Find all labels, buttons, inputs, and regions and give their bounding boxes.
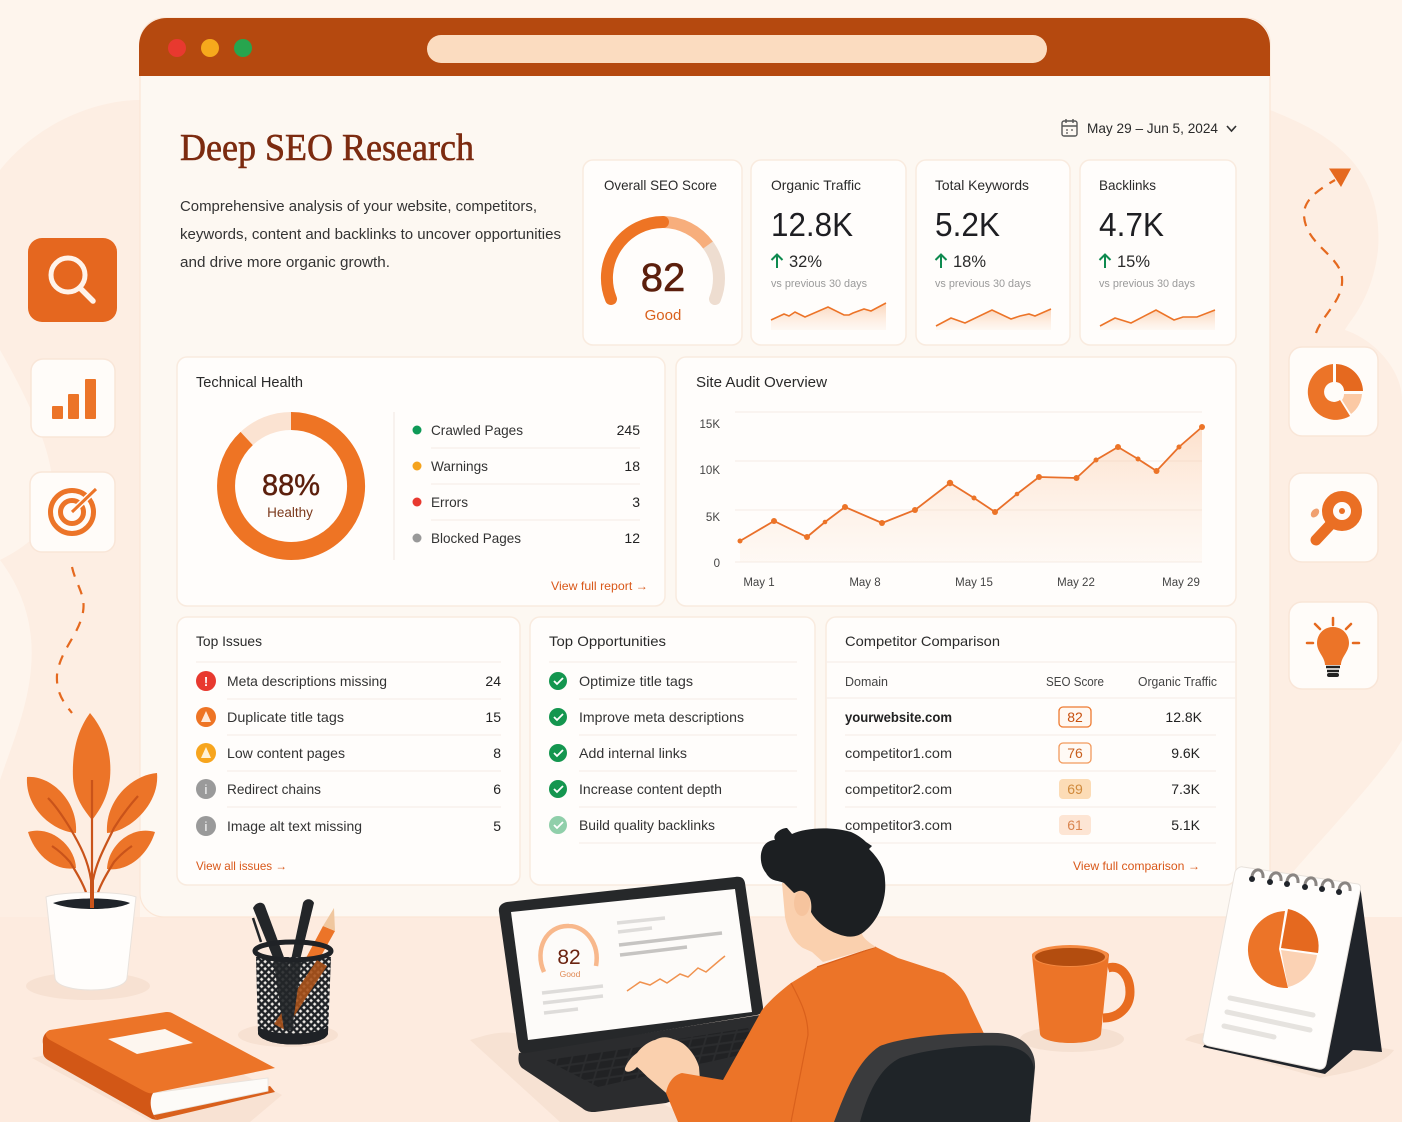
calendar back bbox=[1203, 885, 1382, 1074]
row: competitor1.com: 76 bbox=[1067, 745, 1083, 761]
screen gauge: 82 bbox=[557, 946, 581, 969]
soil bbox=[53, 898, 130, 909]
spiral rings bbox=[1252, 870, 1350, 892]
panel: site audit overview: Site Audit Overview bbox=[696, 375, 828, 391]
panel: total keywords: Total Keywords bbox=[935, 177, 1029, 193]
panel: technical health: View full report → bbox=[551, 579, 648, 593]
description text: Comprehensive analysis of your website, competitors, bbox=[180, 198, 537, 215]
status list: 12 bbox=[624, 530, 640, 546]
panel: competitor comparison bbox=[826, 617, 1236, 885]
opportunity row: content depth: Increase content depth bbox=[579, 781, 722, 797]
icon: light bulb bbox=[1289, 602, 1378, 689]
status list: Errors bbox=[431, 494, 468, 510]
icon: pie chart bbox=[1289, 347, 1378, 436]
description text bbox=[180, 198, 561, 271]
issue row: duplicate title tags: Duplicate title tags bbox=[227, 709, 344, 725]
plant bbox=[26, 713, 157, 1000]
pen holder bbox=[238, 899, 338, 1047]
dashed arrow left bbox=[57, 567, 84, 713]
mesh cup bbox=[256, 957, 331, 1044]
line chart: 0 bbox=[714, 558, 720, 570]
row: yourwebsite.com: yourwebsite.com bbox=[845, 709, 952, 725]
status list bbox=[412, 422, 640, 546]
icon: magnifier bbox=[1289, 473, 1378, 562]
icon: bar chart bbox=[31, 359, 115, 437]
row: yourwebsite.com: 12.8K bbox=[1165, 709, 1203, 725]
panel: backlinks: 15% bbox=[1117, 252, 1150, 271]
issue row: meta descriptions: Meta descriptions missing bbox=[227, 673, 387, 689]
issue row: meta descriptions: ! bbox=[204, 674, 208, 689]
row: competitor1.com: competitor1.com bbox=[845, 745, 952, 761]
panel: overall SEO score bbox=[583, 160, 742, 345]
panel: organic traffic bbox=[751, 160, 906, 345]
status list: Crawled Pages bbox=[431, 422, 523, 438]
laptop bbox=[470, 877, 790, 1122]
opportunity row: backlinks: Build quality backlinks bbox=[579, 817, 715, 833]
row: competitor3.com: 5.1K bbox=[1171, 817, 1201, 833]
book pages bbox=[149, 1078, 268, 1115]
opportunity row: internal links bbox=[549, 744, 687, 762]
panel: organic traffic: vs previous 30 days bbox=[771, 278, 867, 290]
line chart: 10K bbox=[700, 465, 720, 477]
panel: technical health: Technical Health bbox=[196, 375, 303, 391]
issue row: duplicate title tags bbox=[196, 707, 501, 727]
icon: calendar bbox=[1062, 119, 1077, 136]
panel: backlinks: Backlinks bbox=[1099, 177, 1156, 193]
description text: keywords, content and backlinks to uncover opportunities bbox=[180, 226, 561, 243]
issue row: low content pages bbox=[196, 743, 501, 763]
row: yourwebsite.com bbox=[845, 707, 1203, 727]
row: competitor2.com: 7.3K bbox=[1171, 781, 1201, 797]
row: competitor2.com: 69 bbox=[1067, 781, 1083, 797]
issue row: image alt text: Image alt text missing bbox=[227, 818, 362, 834]
book label bbox=[108, 1029, 193, 1054]
screen gauge: Good bbox=[560, 969, 581, 979]
status list: Blocked Pages bbox=[431, 530, 521, 546]
leaves bbox=[27, 713, 157, 869]
screen gauge bbox=[540, 926, 597, 979]
icon: up arrow bbox=[936, 254, 946, 268]
panel: technical health: Healthy bbox=[267, 505, 313, 520]
line chart: 5K bbox=[706, 512, 720, 524]
issue row: image alt text: 5 bbox=[493, 818, 501, 834]
panel: technical health: 88% bbox=[262, 469, 320, 502]
panel: total keywords: vs previous 30 days bbox=[935, 278, 1031, 290]
row: competitor1.com bbox=[845, 743, 1201, 763]
row: competitor3.com: competitor3.com bbox=[845, 817, 952, 833]
icon: search bbox=[28, 238, 117, 322]
office chair bbox=[834, 1033, 1035, 1122]
pens bbox=[253, 899, 335, 965]
panel: technical health bbox=[177, 357, 665, 606]
line chart: May 1 bbox=[743, 577, 775, 589]
panel: top issues: View all issues → bbox=[196, 859, 287, 873]
panel: overall SEO score: Overall SEO Score bbox=[604, 177, 717, 193]
table header: Domain bbox=[845, 675, 888, 689]
sparkline bbox=[1100, 310, 1215, 330]
title: Deep SEO Research bbox=[180, 127, 474, 169]
line chart bbox=[700, 412, 1205, 589]
person bbox=[625, 828, 990, 1122]
calendar pie chart bbox=[1248, 909, 1319, 988]
laptop lid bbox=[499, 877, 763, 1053]
sparkline bbox=[936, 309, 1051, 330]
calendar page bbox=[1203, 867, 1361, 1069]
panel: total keywords: 5.2K bbox=[935, 206, 1000, 243]
panel: top issues: Top Issues bbox=[196, 633, 262, 649]
panel: total keywords bbox=[916, 160, 1070, 345]
hand bbox=[625, 1037, 700, 1098]
donut chart bbox=[226, 421, 356, 551]
coffee mug bbox=[1020, 945, 1130, 1052]
line chart: 15K bbox=[700, 419, 720, 431]
row: competitor2.com bbox=[845, 779, 1201, 799]
browser window bbox=[139, 18, 1270, 917]
panel: overall SEO score: Good bbox=[645, 307, 681, 324]
panel: site audit overview bbox=[676, 357, 1236, 606]
window control buttons bbox=[168, 39, 252, 57]
status list: 245 bbox=[617, 422, 640, 438]
panel: total keywords: 18% bbox=[953, 252, 986, 271]
table header: Organic Traffic bbox=[1138, 675, 1217, 689]
dashed arrow right bbox=[1304, 168, 1351, 333]
row: competitor3.com: 61 bbox=[1067, 817, 1083, 833]
icon: target bbox=[30, 472, 115, 552]
bottom cover bbox=[150, 1086, 275, 1120]
panel: competitor comparison: View full comparison → bbox=[1073, 859, 1200, 873]
neck and face bbox=[782, 870, 876, 962]
issue row: redirect chains: 6 bbox=[493, 781, 501, 797]
pens inside mesh bbox=[273, 958, 327, 1030]
issue row: redirect chains: Redirect chains bbox=[227, 781, 321, 797]
address bar bbox=[427, 35, 1047, 63]
title bar bbox=[139, 18, 1270, 76]
row: competitor2.com: competitor2.com bbox=[845, 781, 952, 797]
sparkline bbox=[771, 303, 886, 330]
panel: overall SEO score: 82 bbox=[641, 256, 685, 300]
pot bbox=[46, 892, 136, 990]
line chart: May 15 bbox=[955, 577, 993, 589]
status list: Warnings bbox=[431, 458, 488, 474]
opportunity row: title tags bbox=[549, 672, 693, 690]
panel: organic traffic: Organic Traffic bbox=[771, 177, 861, 193]
top cover bbox=[46, 1012, 275, 1093]
status list: 18 bbox=[624, 458, 640, 474]
row: yourwebsite.com: 82 bbox=[1067, 709, 1083, 725]
panel: backlinks bbox=[1080, 160, 1236, 345]
panel: backlinks: 4.7K bbox=[1099, 206, 1164, 243]
date range picker: May 29 – Jun 5, 2024 bbox=[1087, 120, 1218, 136]
laptop base bbox=[518, 1015, 790, 1112]
opportunity row: internal links: Add internal links bbox=[579, 745, 687, 761]
issue row: redirect chains: i bbox=[205, 782, 208, 797]
pot shadow bbox=[26, 972, 150, 1000]
panel: top issues bbox=[177, 617, 520, 885]
hair bbox=[761, 828, 885, 937]
issue row: low content pages: Low content pages bbox=[227, 745, 345, 761]
issue row: low content pages: 8 bbox=[493, 745, 501, 761]
screen chart bbox=[627, 956, 725, 991]
panel: top opportunities bbox=[530, 617, 815, 885]
screen lines bbox=[542, 918, 665, 1013]
line chart: May 29 bbox=[1162, 577, 1200, 589]
icon: up arrow bbox=[1100, 254, 1110, 268]
row: competitor3.com bbox=[845, 815, 1201, 835]
issue row: image alt text bbox=[196, 816, 501, 836]
shirt bbox=[666, 947, 990, 1122]
desk calendar bbox=[1185, 867, 1394, 1078]
calendar text lines bbox=[1224, 998, 1313, 1037]
issue row: image alt text: i bbox=[205, 819, 208, 834]
icon: up arrow bbox=[772, 254, 782, 268]
description text: and drive more organic growth. bbox=[180, 254, 390, 271]
table header: SEO Score bbox=[1046, 675, 1104, 689]
status list: 3 bbox=[632, 494, 640, 510]
panel: organic traffic: 12.8K bbox=[771, 206, 853, 243]
panel: top opportunities: Top Opportunities bbox=[549, 633, 666, 649]
issue row: duplicate title tags: 15 bbox=[485, 709, 501, 725]
table header bbox=[845, 675, 1217, 689]
line chart: May 22 bbox=[1057, 577, 1095, 589]
ear bbox=[794, 890, 810, 916]
opportunity row: meta descriptions: Improve meta descriptions bbox=[579, 709, 744, 725]
book bbox=[32, 1012, 282, 1122]
stems bbox=[48, 780, 138, 905]
panel: backlinks: vs previous 30 days bbox=[1099, 278, 1195, 290]
panel: organic traffic: 32% bbox=[789, 252, 822, 271]
issue row: meta descriptions bbox=[196, 671, 501, 691]
spine bbox=[43, 1030, 157, 1120]
laptop screen bbox=[511, 889, 752, 1040]
line chart: May 8 bbox=[849, 577, 881, 589]
row: competitor1.com: 9.6K bbox=[1171, 745, 1201, 761]
gauge bbox=[607, 222, 719, 299]
opportunity row: title tags: Optimize title tags bbox=[579, 673, 693, 689]
issue row: meta descriptions: 24 bbox=[485, 673, 501, 689]
issue row: redirect chains bbox=[196, 779, 501, 799]
panel: competitor comparison: Competitor Comparison bbox=[845, 633, 1000, 649]
